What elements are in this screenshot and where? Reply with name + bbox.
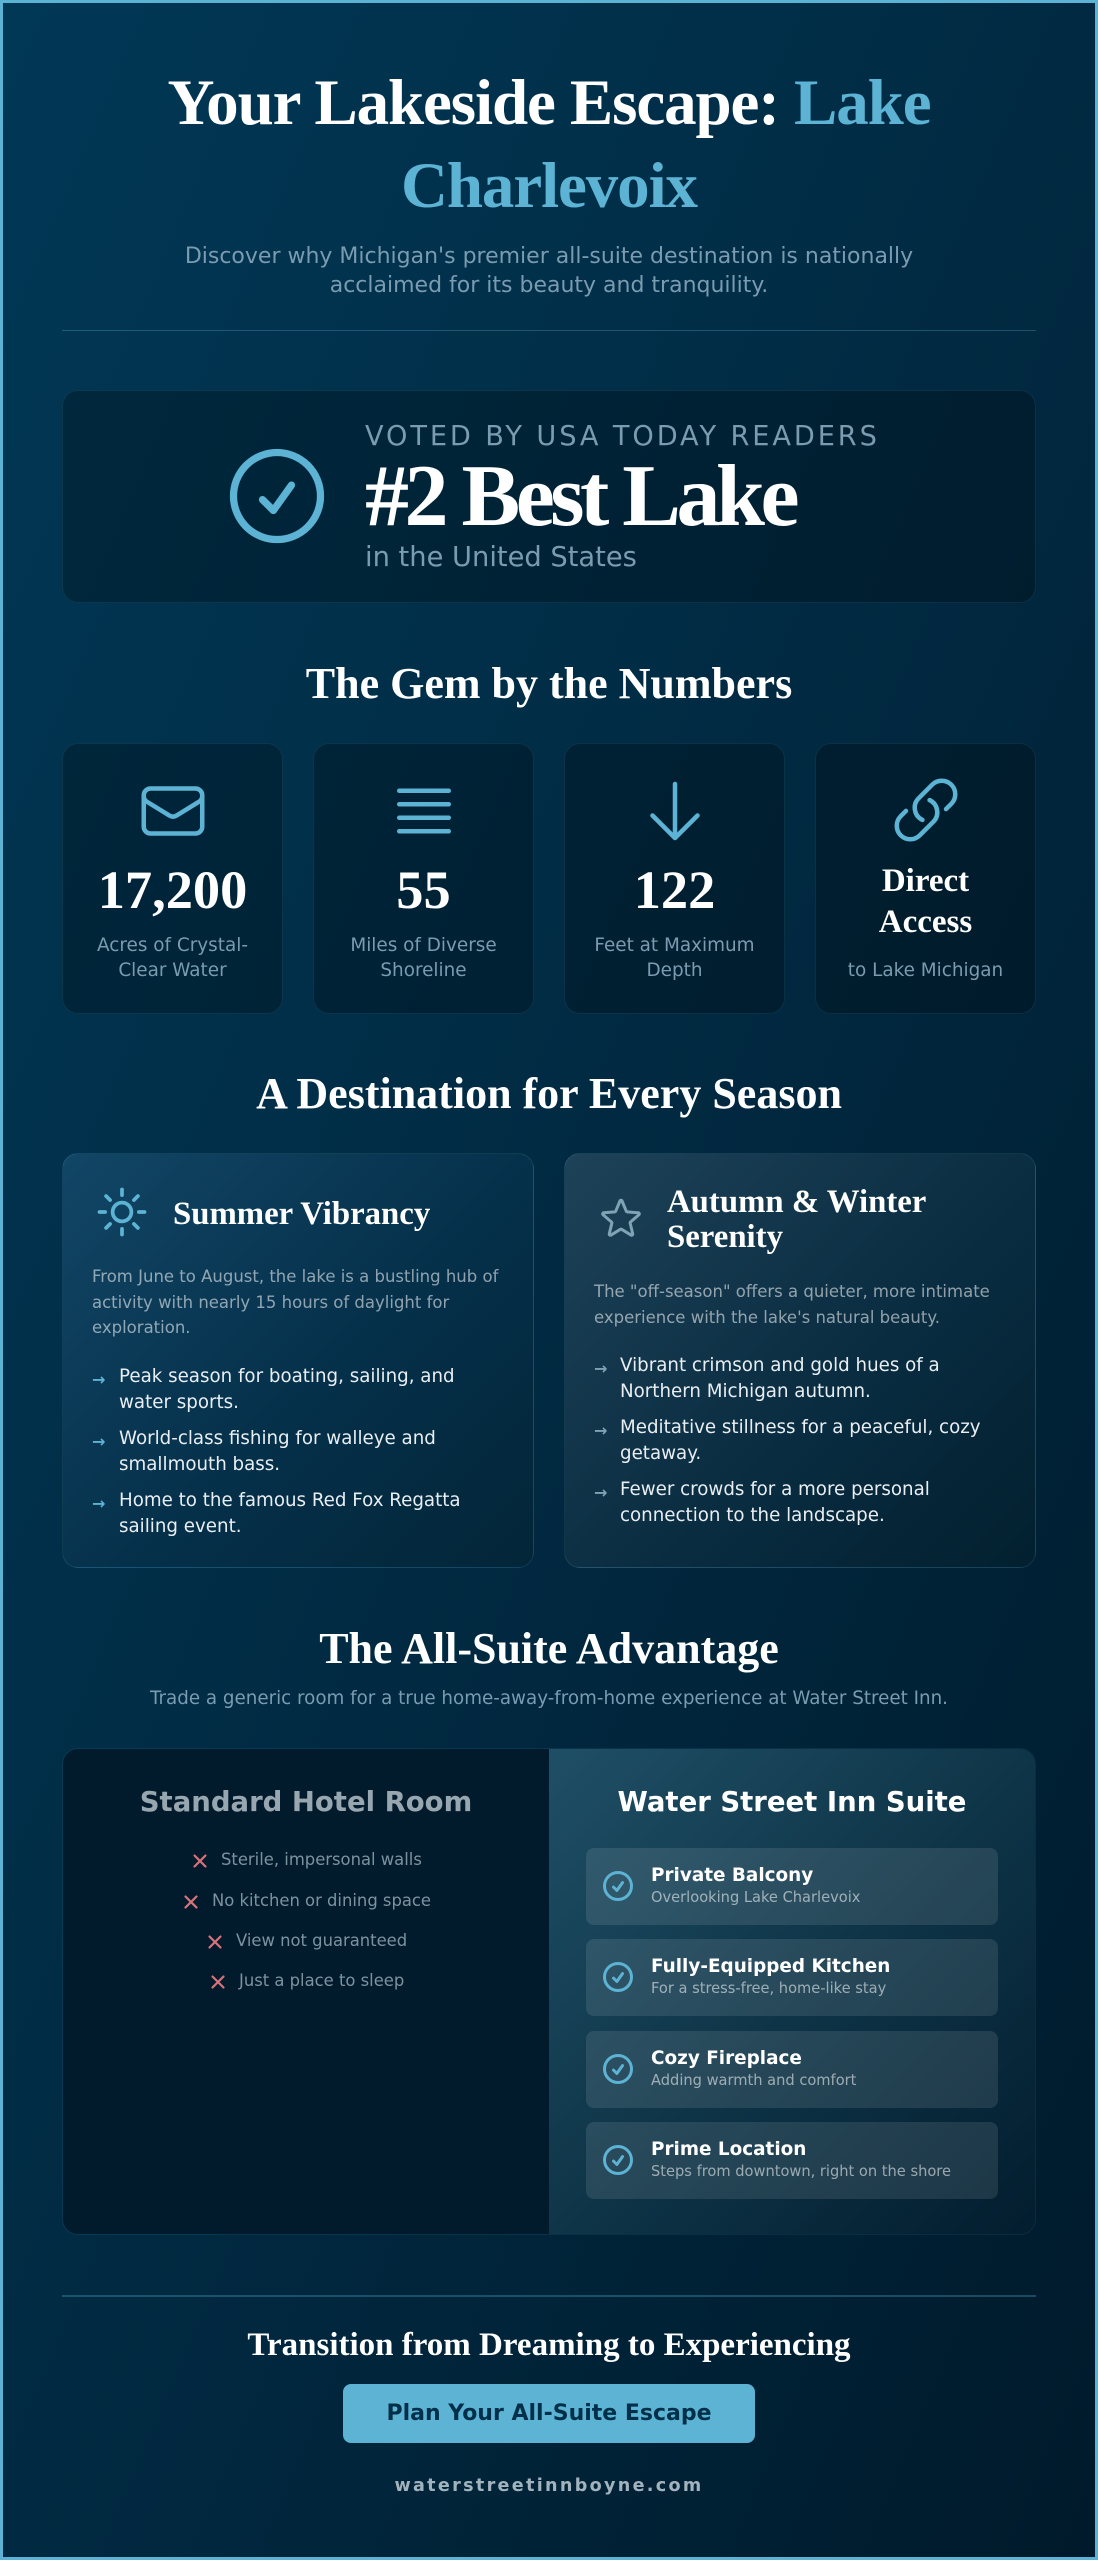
negative row [184, 1890, 431, 1910]
bullet arrow: → [594, 1483, 607, 1502]
feature detail: Steps from downtown, right on the shore [651, 2163, 951, 2180]
autumn heading: Serenity [667, 1219, 783, 1255]
title [168, 67, 930, 222]
stat label: Feet at Maximum [594, 935, 755, 956]
panel: best lake award [62, 390, 1036, 603]
stat label: Miles of Diverse [350, 935, 497, 956]
feature card [586, 1848, 998, 1925]
suite heading: Water Street Inn Suite [618, 1786, 966, 1818]
bullet text: Peak season for boating, sailing, and [119, 1366, 455, 1386]
bullet text: Home to the famous Red Fox Regatta [119, 1490, 461, 1510]
negative row [211, 1971, 404, 1990]
negative text: Just a place to sleep [239, 1971, 404, 1990]
button: plan your escape: Plan Your All-Suite Escape [386, 2401, 712, 2426]
award headline: #2 Best Lake [365, 448, 795, 545]
summer intro: exploration. [92, 1318, 191, 1337]
stat label: Depth [646, 960, 703, 981]
column: water street inn suite [549, 1749, 1037, 2236]
autumn heading [667, 1184, 926, 1255]
bullet text [119, 1366, 455, 1412]
summer intro: From June to August, the lake is a bustling hub of [92, 1267, 498, 1286]
stat value: Direct [882, 862, 969, 898]
column: standard hotel room [63, 1749, 549, 2236]
summer heading: Summer Vibrancy [173, 1196, 430, 1232]
feature detail: For a stress-free, home-like stay [651, 1980, 886, 1997]
stat label [594, 935, 755, 981]
bullet text: getaway. [620, 1443, 701, 1464]
feature card [586, 2030, 998, 2108]
stat value [879, 862, 972, 940]
bullet text: smallmouth bass. [119, 1454, 280, 1474]
bullet arrow: → [594, 1421, 607, 1440]
summer intro: activity with nearly 15 hours of daylight for [92, 1293, 449, 1312]
bullet arrow: → [92, 1494, 105, 1512]
icon: star [601, 1198, 641, 1237]
feature detail: Adding warmth and comfort [651, 2072, 856, 2088]
bullet text [620, 1355, 940, 1402]
subtitle: acclaimed for its beauty and tranquility. [330, 273, 768, 298]
icon: check circle [230, 448, 324, 544]
feature title: Cozy Fireplace [651, 2048, 802, 2068]
icon: check [603, 2145, 633, 2175]
feature card [586, 1939, 998, 2016]
feature title: Private Balcony [651, 1865, 813, 1886]
bullet arrow: → [92, 1432, 105, 1450]
feature card [586, 2122, 998, 2199]
icon: check [603, 2054, 633, 2084]
negative row [208, 1931, 407, 1950]
stat value: 17,200 [98, 860, 247, 920]
panel: summer [62, 1153, 534, 1568]
award sub text: in the United States [365, 542, 637, 572]
subtitle [185, 244, 913, 298]
stat value: 122 [634, 860, 715, 920]
advantage sub text: Trade a generic room for a true home-away-from-home experience at Water Street Inn. [150, 1688, 948, 1708]
autumn intro: The "off-season" offers a quieter, more intimate [594, 1282, 990, 1301]
website url: waterstreetinnboyne.com [394, 2476, 704, 2496]
heading: numbers: The Gem by the Numbers [306, 659, 792, 708]
award eyebrow: VOTED BY USA TODAY READERS [365, 421, 880, 452]
autumn intro [594, 1282, 990, 1327]
stat label: Acres of Crystal- [97, 935, 248, 956]
button: plan your escape [343, 2384, 755, 2443]
standard heading: Standard Hotel Room [140, 1786, 472, 1818]
call to action heading: Transition from Dreaming to Experiencing [247, 2327, 851, 2363]
title: Your Lakeside Escape: Lake [168, 67, 930, 139]
negative text: Sterile, impersonal walls [221, 1850, 422, 1869]
icon: x [184, 1895, 198, 1909]
bullet arrow: → [594, 1359, 607, 1378]
bullet text [119, 1428, 436, 1474]
heading: seasons: A Destination for Every Season [256, 1069, 842, 1118]
icon: chain link [894, 778, 958, 842]
autumn heading: Autumn & Winter [667, 1184, 926, 1220]
feature detail: Overlooking Lake Charlevoix [651, 1889, 860, 1906]
stat value: Access [879, 904, 972, 940]
stat label: to Lake Michigan [848, 960, 1003, 981]
bullet text [119, 1490, 461, 1536]
autumn intro: experience with the lake's natural beauty. [594, 1308, 940, 1327]
stat value: 55 [396, 860, 451, 920]
bullet text: World-class fishing for walleye and [119, 1428, 436, 1448]
icon: check [603, 1871, 633, 1901]
negative text: No kitchen or dining space [212, 1890, 431, 1910]
bullet text: Vibrant crimson and gold hues of a [620, 1355, 940, 1376]
stat label: Clear Water [118, 960, 227, 981]
bullet text: connection to the landscape. [620, 1505, 885, 1526]
icon: sun [98, 1188, 146, 1236]
bullet text [620, 1417, 981, 1464]
bullet text [620, 1479, 930, 1526]
stat card: access [815, 743, 1036, 1014]
bullet text: sailing event. [119, 1516, 242, 1536]
panel: comparison [62, 1748, 1036, 2235]
icon: x [208, 1935, 222, 1949]
stat label [350, 935, 497, 981]
negative row [193, 1850, 422, 1869]
negative text: View not guaranteed [236, 1931, 407, 1950]
bullet text: Northern Michigan autumn. [620, 1381, 871, 1402]
stat card: shoreline [313, 743, 534, 1014]
stat label [97, 935, 248, 981]
feature title: Prime Location [651, 2139, 806, 2160]
feature title: Fully-Equipped Kitchen [651, 1956, 890, 1977]
summer intro [92, 1267, 499, 1337]
bullet arrow: → [92, 1370, 105, 1388]
icon: x [193, 1854, 207, 1868]
summer list [92, 1366, 461, 1536]
bullet text: Meditative stillness for a peaceful, cozy [620, 1417, 981, 1438]
icon: envelope [142, 786, 204, 836]
icon: arrow down [650, 782, 700, 840]
icon: check [603, 1962, 633, 1992]
bullet text: Fewer crowds for a more personal [620, 1479, 930, 1500]
bullet text: water sports. [119, 1392, 239, 1412]
heading: all-suite advantage: The All-Suite Advantage [319, 1624, 779, 1673]
stat card: acres [62, 743, 283, 1014]
stat card: depth [564, 743, 785, 1014]
icon: lines [397, 788, 451, 834]
subtitle: Discover why Michigan's premier all-suite destination is nationally [185, 244, 913, 269]
panel: autumn and winter [564, 1153, 1036, 1568]
title: Charlevoix [401, 150, 697, 222]
icon: x [211, 1975, 225, 1989]
autumn list [594, 1355, 981, 1526]
stat label: Shoreline [380, 960, 467, 981]
